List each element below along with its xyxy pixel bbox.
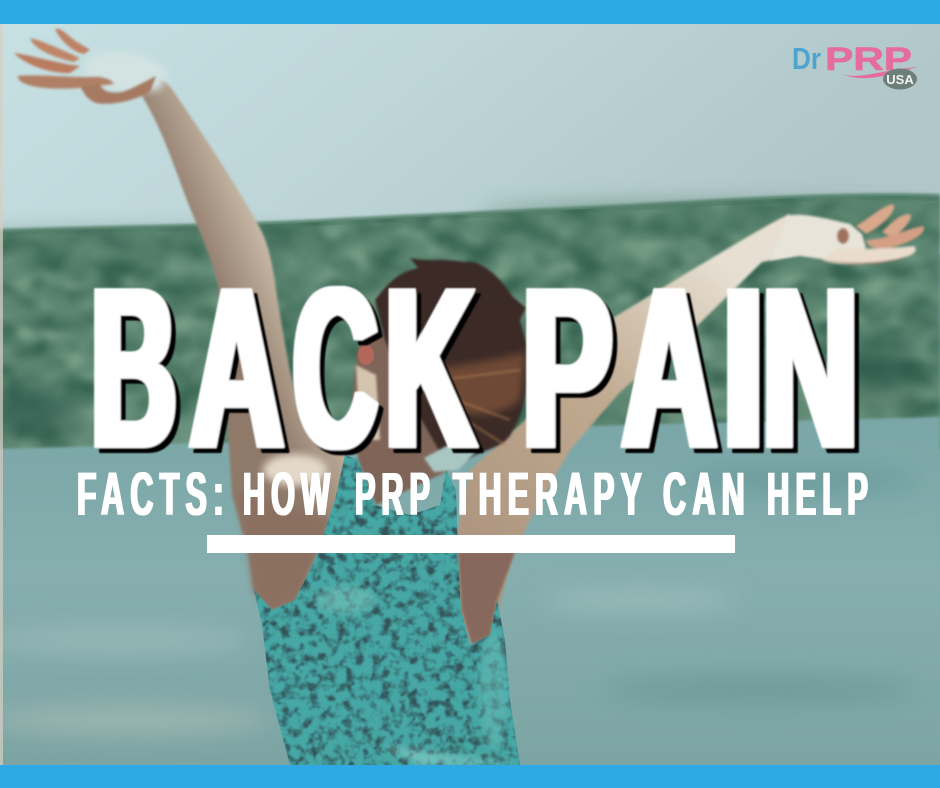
right flank shadow <box>458 552 515 644</box>
subtitle: THERAPY <box>453 460 648 528</box>
underline bar <box>207 535 735 553</box>
title: BACK PAIN <box>91 242 858 496</box>
title: BACK PAIN: B <box>91 242 176 496</box>
right hand <box>770 204 924 264</box>
logo: Dr PRP USA <box>792 41 918 90</box>
left hand <box>14 29 168 104</box>
gap between neck and shoulder <box>424 443 476 472</box>
armpit highlight <box>263 454 327 486</box>
subtitle: CAN <box>663 460 751 528</box>
left image edge <box>0 24 3 765</box>
title: BACK PAIN: K <box>385 242 475 496</box>
title: BACK PAIN: I <box>722 242 764 496</box>
photo background: forested hills <box>0 193 940 450</box>
title: BACK PAIN: A <box>622 242 716 496</box>
title: BACK PAIN: A <box>190 242 283 496</box>
photo background: lake water <box>0 417 940 765</box>
subtitle: FACTS: <box>77 460 230 528</box>
right arm and shoulder <box>458 214 792 644</box>
logo wordmark Dr: Dr <box>792 41 821 76</box>
subtitle: HOW <box>243 460 336 528</box>
title: BACK PAIN: C <box>293 242 377 496</box>
left flank shadow <box>236 490 330 610</box>
hair <box>375 258 527 460</box>
subtitle <box>77 460 874 528</box>
logo swoosh <box>842 67 918 78</box>
bottom blue band <box>0 765 940 788</box>
top blue band <box>0 0 940 24</box>
neck and ear <box>352 330 450 505</box>
photo background: sky <box>0 24 940 254</box>
title: BACK PAIN: P <box>522 242 612 496</box>
pale sunlit palm <box>84 52 168 92</box>
logo wordmark PRP: PRP <box>825 41 912 77</box>
title: BACK PAIN: N <box>762 242 858 496</box>
left arm and flank <box>140 77 352 610</box>
logo USA badge: USA <box>886 72 914 87</box>
subtitle: PRP <box>355 460 436 528</box>
teal lace top <box>250 450 525 766</box>
fingers and thumb <box>14 29 156 104</box>
